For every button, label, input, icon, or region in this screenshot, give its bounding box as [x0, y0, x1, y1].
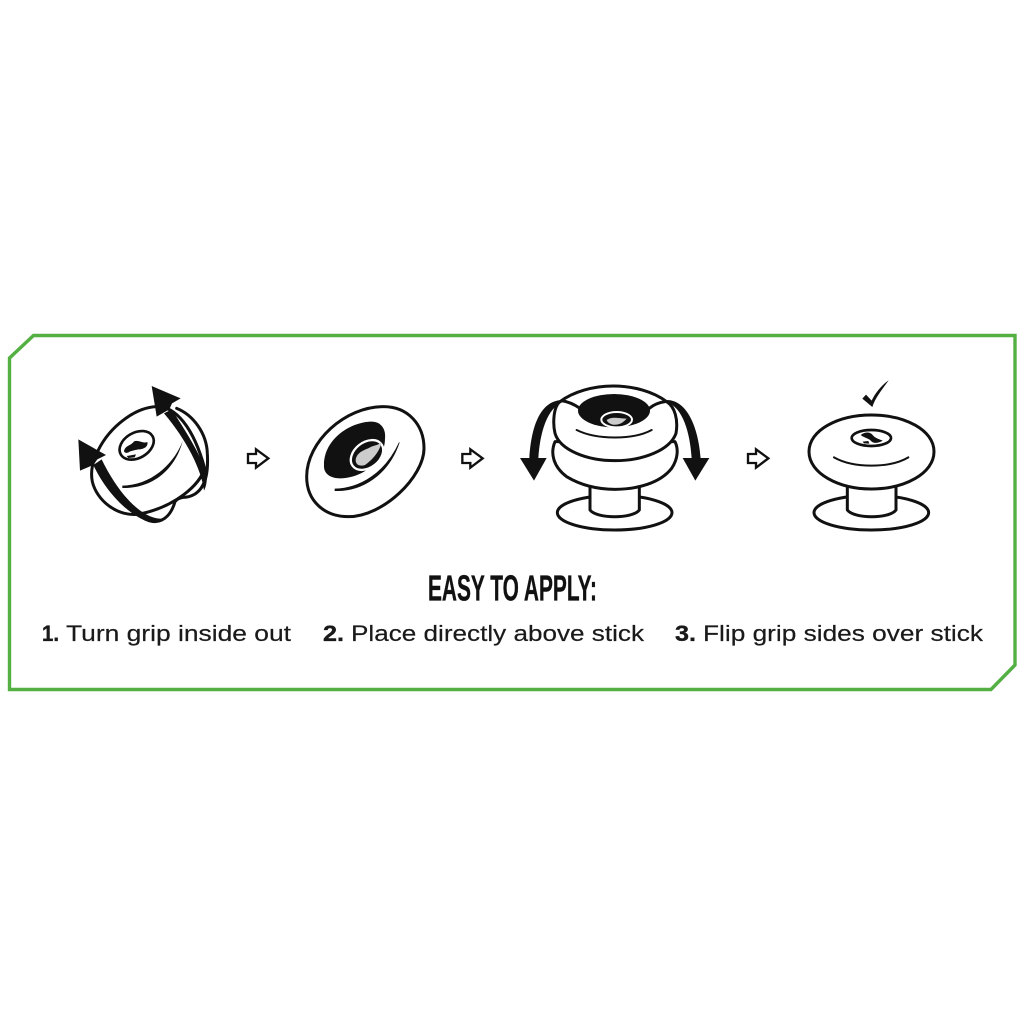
icon: finished grip on stick with checkmark	[748, 380, 934, 530]
text: step 2: Place directly above stick	[351, 621, 645, 646]
text: step 3: 3.	[675, 621, 696, 646]
arrow: step connector 2	[462, 449, 483, 468]
icon: checkmark	[862, 380, 889, 407]
panel: green chamfered frame	[10, 336, 1015, 690]
heading: easy to apply: EASY TO APPLY:	[428, 568, 597, 608]
icon: inverted grip tilted	[307, 407, 483, 517]
arrow: step connector 3	[748, 449, 768, 468]
text: step 3: Flip grip sides over stick	[703, 621, 984, 646]
text: step 1: 1.	[42, 621, 59, 646]
text: step 2: 2.	[323, 621, 344, 646]
arrow: step connector 1	[248, 449, 268, 468]
icon: flipping grip over stick with arrows	[520, 386, 709, 530]
text: step 1: Turn grip inside out	[66, 621, 292, 646]
icon: grip turned inside out with arrows	[78, 386, 268, 522]
